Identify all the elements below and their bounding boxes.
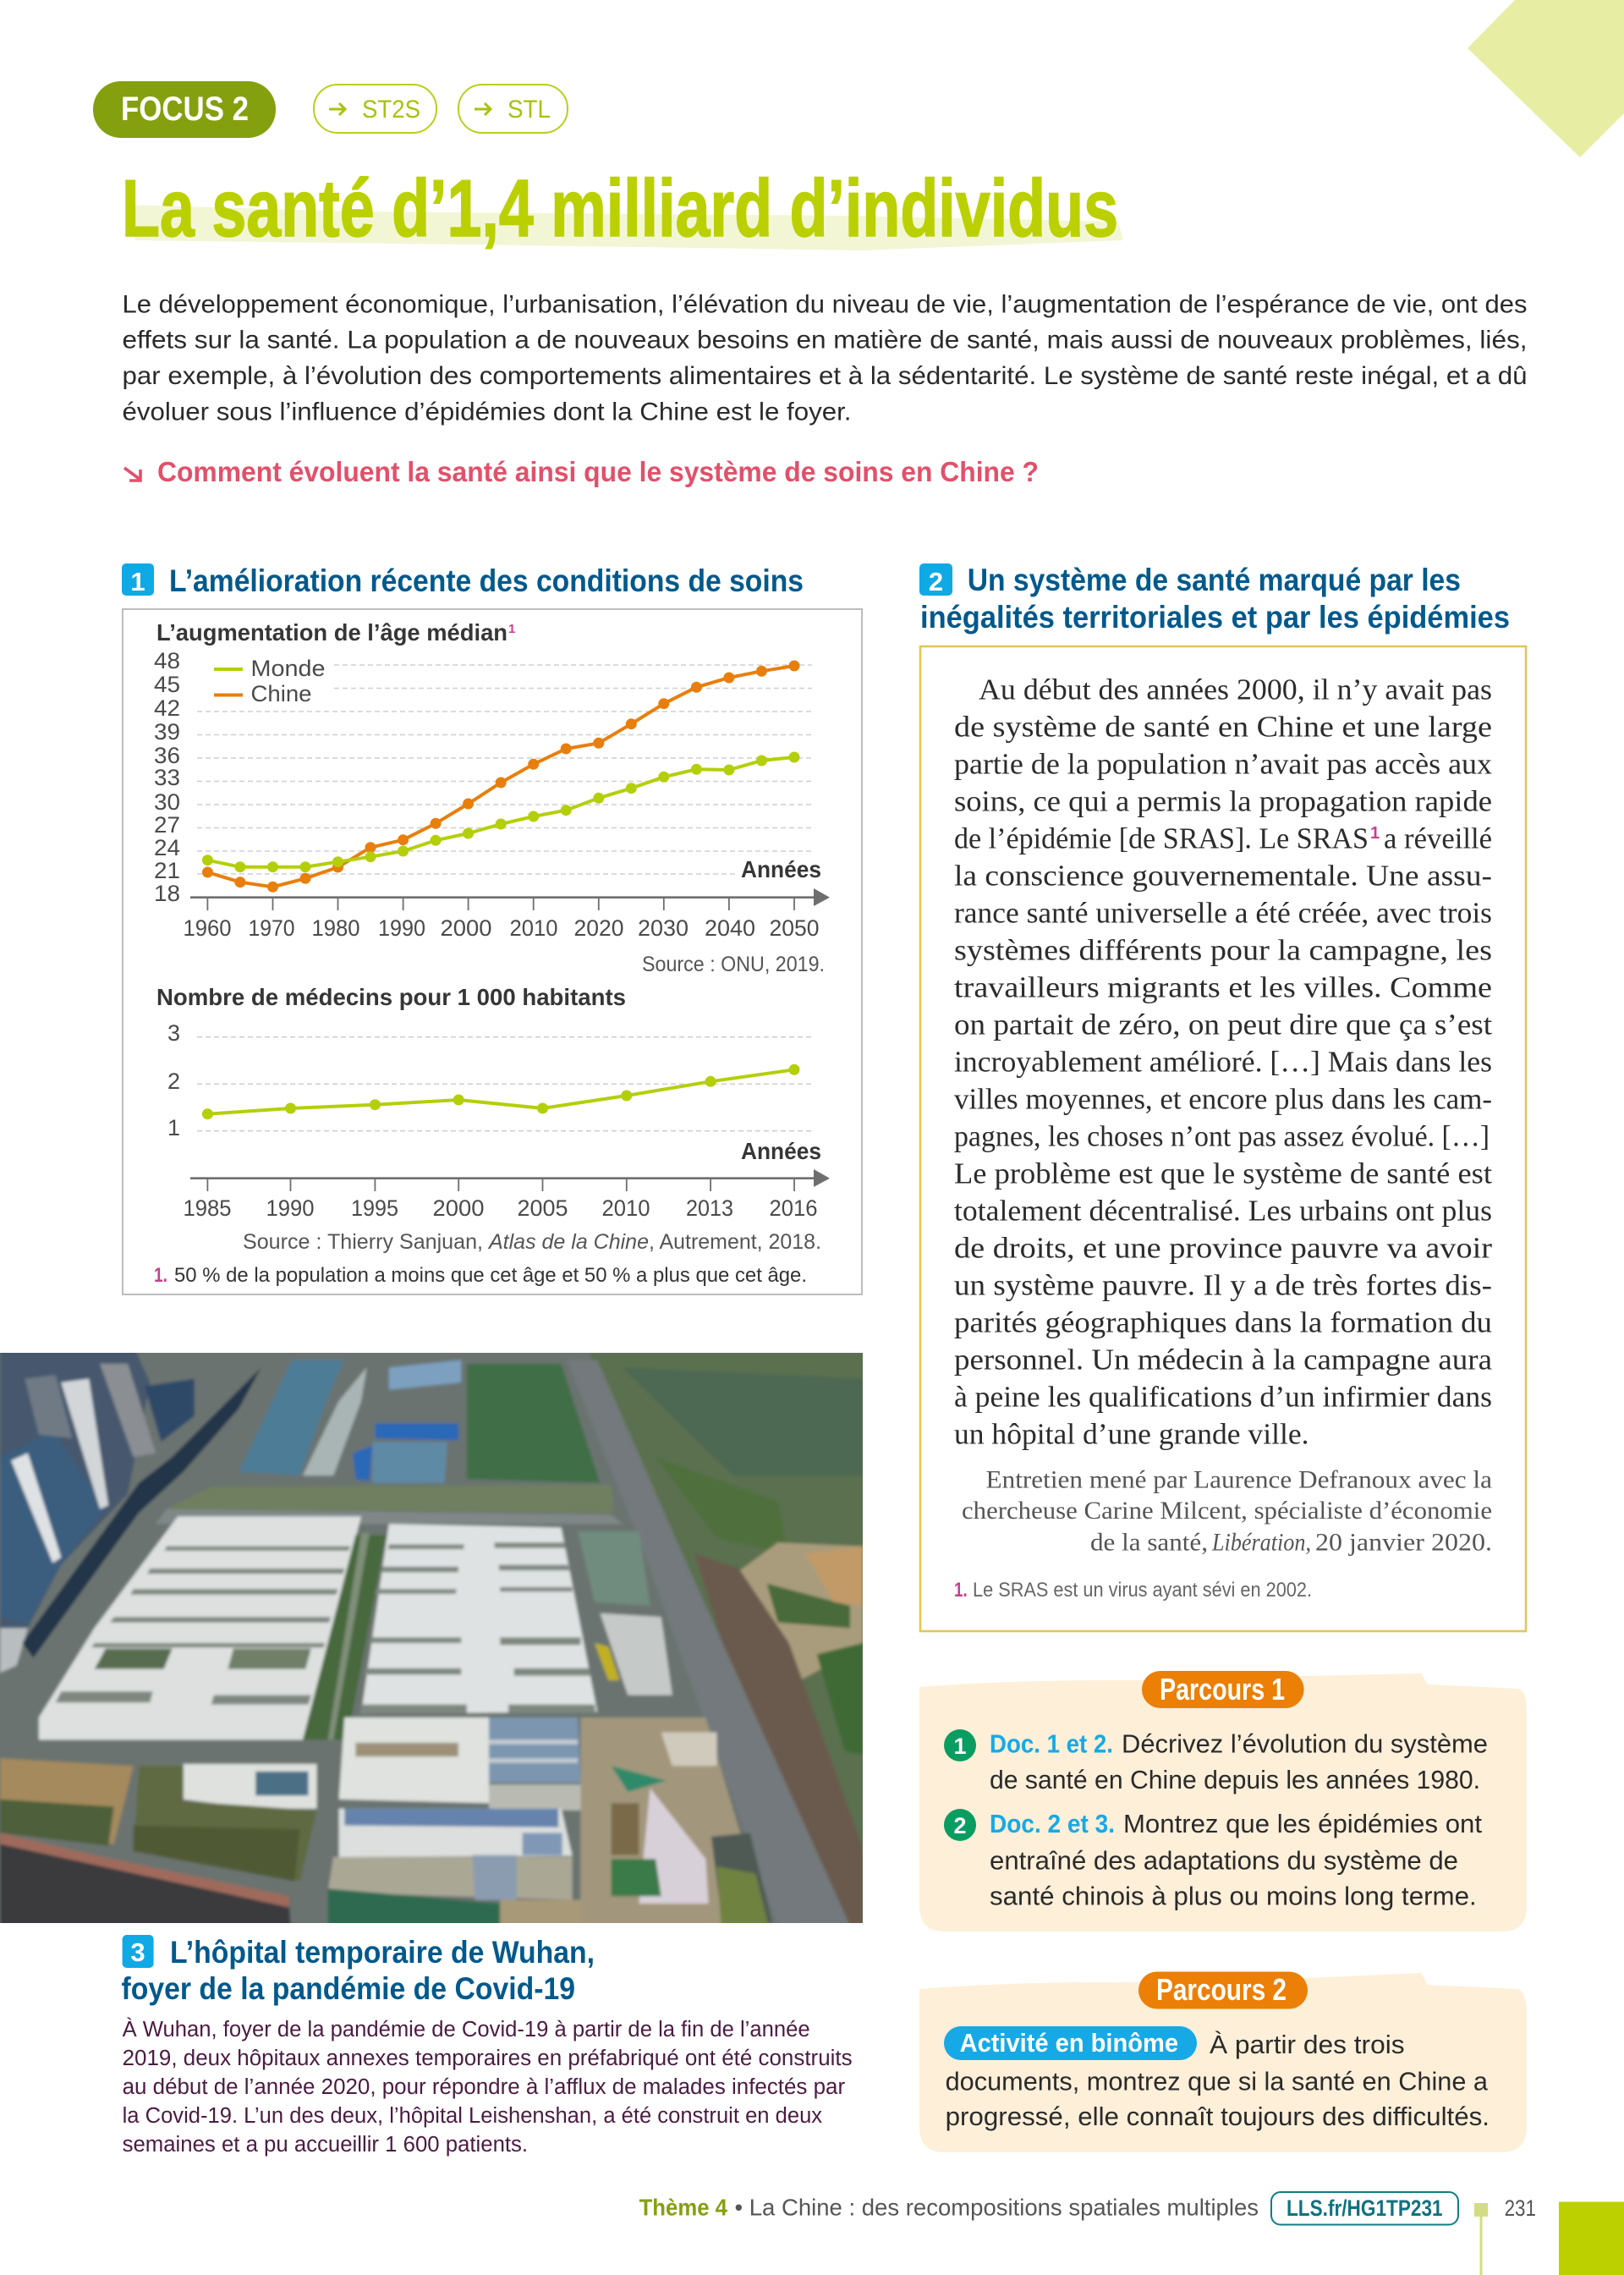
source: Sanjuan: Atlas de la Chine (487, 1230, 649, 1254)
interview text: systèmes différents pour la campagne, les (954, 934, 1492, 967)
tag: STL (458, 85, 568, 133)
interview text: Au début des années 2000, il n’y avait pas (979, 673, 1492, 706)
interview attribution: chercheuse Carine Milcent, spécialiste d’économie (962, 1497, 1492, 1525)
x axis years: 2010 (602, 1195, 650, 1221)
y axis values: 36 (154, 743, 180, 768)
document 2 heading: Un système de santé marqué par les (968, 563, 1461, 597)
title with brush highlight: La santé d’1,4 milliard d’individus (122, 163, 1118, 254)
interview text: un hôpital d’une grande ville. (954, 1418, 1309, 1451)
source: Sanjuan (243, 1230, 821, 1254)
problem question: Comment évoluent la santé ainsi que le système de soins en Chine ? (157, 456, 1039, 487)
x axis years: 2016 (770, 1195, 817, 1221)
y axis values: 18 (154, 881, 180, 906)
y axis values: 24 (154, 835, 180, 860)
question 1: Doc. 1 et 2. (990, 1729, 1113, 1759)
y axis values: 33 (154, 765, 180, 790)
activity text (946, 2030, 1490, 2131)
corner lime block (1559, 2201, 1624, 2275)
chart heading: median age: L’augmentation de l’âge médian (156, 619, 508, 646)
question 2: entraîné des adaptations du système de (990, 1846, 1458, 1876)
line chart: median age (154, 648, 830, 941)
y axis values: 21 (154, 858, 180, 883)
interview text: 1 (1370, 824, 1380, 843)
line chart: doctors per 1000 (167, 1020, 830, 1221)
activity text: À partir des trois (1210, 2030, 1405, 2059)
y axis values (167, 1020, 180, 1140)
x axis years: 1995 (351, 1195, 398, 1221)
question 2: Montrez que les épidémies ont (1123, 1809, 1482, 1838)
x axis years: 2013 (686, 1195, 733, 1221)
pill: Parcours 1: Parcours 1 (1160, 1672, 1285, 1706)
interview attribution: Entretien mené par Laurence Defranoux avec la (986, 1465, 1492, 1493)
y axis values: 3 (167, 1020, 180, 1046)
chart heading: doctors: Nombre de médecins pour 1 000 habitants (156, 984, 626, 1010)
tag: ST2S: ST2S (362, 96, 420, 124)
y axis values: 27 (154, 812, 180, 838)
x axis years: 2010 (509, 915, 558, 941)
interview text: villes moyennes, et encore plus dans les cam- (954, 1083, 1492, 1116)
caption paragraph: Wuhan: la Covid-19. L’un des deux, l’hôpital Leishenshan, a été construit en deux (123, 2104, 822, 2128)
x axis years: 2000 (433, 1195, 484, 1221)
x axis years: 2005 (518, 1195, 568, 1221)
question 2: 2 (953, 1813, 967, 1838)
caption paragraph: Wuhan: 2019, deux hôpitaux annexes temporaires en préfabriqué ont été construits (123, 2047, 853, 2070)
y axis values (154, 648, 180, 906)
page number: 231 (1505, 2195, 1536, 2221)
question 1 (944, 1729, 1488, 1794)
question 1: 1 (953, 1734, 967, 1759)
pill: Activité en binôme: Activité en binôme (960, 2028, 1178, 2058)
badge: FOCUS 2 (93, 81, 276, 138)
interview text: soins, ce qui a permis la propagation rapide (954, 785, 1492, 818)
interview text: de l’épidémie [de SRAS]. Le SRAS (954, 822, 1369, 855)
chart heading: median age: 1 (508, 622, 515, 636)
panel: interview text frame (920, 646, 1526, 1631)
interview text: totalement décentralisé. Les urbains ont plus (954, 1195, 1492, 1228)
caption paragraph: Wuhan (123, 2017, 853, 2157)
x axis years: 1990 (266, 1195, 315, 1221)
source: ONU: Source : ONU, 2019. (642, 953, 825, 976)
series: Chine (202, 660, 799, 893)
x axis years: 2040 (705, 915, 755, 941)
y axis values: 1 (167, 1115, 180, 1140)
interview text: un système pauvre. Il y a de très fortes dis- (954, 1269, 1492, 1302)
interview text: partie de la population n’avait pas accès aux (954, 748, 1493, 781)
activity text: documents, montrez que si la santé en Chine a (946, 2066, 1489, 2096)
footnote: SRAS: 1. (954, 1579, 968, 1602)
x axis years (183, 1195, 817, 1221)
interview attribution: Libération, (1211, 1529, 1311, 1557)
interview attribution (962, 1465, 1492, 1557)
x axis years: 2020 (573, 915, 624, 941)
document 2 heading: 2 (929, 567, 943, 596)
source: Sanjuan: Source : Thierry Sanjuan, (243, 1230, 483, 1254)
interview text: rance santé universelle a été créée, avec trois (954, 897, 1492, 930)
axis label: Années (741, 856, 821, 882)
badge: FOCUS 2: FOCUS 2 (121, 91, 249, 128)
footer link pill: LLS.fr/HG1TP231 (1287, 2195, 1443, 2221)
interview text: on partait de zéro, on peut dire que ça s’est (954, 1008, 1492, 1041)
pill: Parcours 2: Parcours 2 (1156, 1972, 1287, 2007)
x axis years: 1985 (183, 1195, 232, 1221)
question 1: Décrivez l’évolution du système (1122, 1729, 1488, 1759)
source: Sanjuan: , Autrement, 2018. (649, 1230, 821, 1254)
y axis values: 48 (154, 648, 180, 673)
footnote: median age: 1. (154, 1264, 167, 1287)
document 2 heading: inégalités territoriales et par les épidémies (920, 600, 1510, 635)
intro paragraph: par exemple, à l’évolution des comportements alimentaires et à la sédentarité. Le système de santé reste inégal, et a dû (122, 362, 1528, 390)
x axis years: 1990 (378, 915, 425, 941)
x axis years: 2030 (638, 915, 689, 941)
interview text: parités géographiques dans la formation du (954, 1306, 1492, 1339)
document 3 heading: 3 (130, 1937, 145, 1967)
axis arrow (190, 1169, 830, 1191)
y axis values: 42 (154, 695, 180, 721)
question 2: santé chinois à plus ou moins long terme. (990, 1882, 1477, 1910)
panel: Parcours 1 (919, 1671, 1527, 1932)
caption paragraph: Wuhan: semaines et a pu accueillir 1 600 patients. (123, 2133, 528, 2157)
footnote: median age: 50 % de la population a moins que cet âge et 50 % a plus que cet âge. (174, 1264, 807, 1287)
legend: Monde (250, 656, 325, 681)
series: doctors (202, 1064, 799, 1119)
legend: Chine (250, 681, 311, 706)
interview attribution: de la santé, (1090, 1529, 1208, 1557)
x axis years: 2050 (770, 915, 819, 941)
panel: Parcours 2 (919, 1971, 1527, 2152)
y axis values: 39 (154, 719, 180, 745)
axis label: Années (741, 1138, 821, 1164)
footer theme text: Thème 4 (639, 2195, 727, 2220)
tag: STL: STL (508, 96, 551, 124)
axis arrow (190, 888, 830, 910)
x axis years: 2000 (440, 915, 492, 941)
document 1 heading: L’amélioration récente des conditions de soins (169, 563, 804, 598)
document 3 heading: foyer de la pandémie de Covid-19 (122, 1971, 575, 2006)
interview text (954, 673, 1493, 1451)
document 3 heading (122, 1935, 595, 2006)
caption paragraph: Wuhan: au début de l’année 2020, pour répondre à l’afflux de malades infectés par (123, 2075, 846, 2099)
panel: charts frame (123, 609, 862, 1294)
document 2 heading (919, 563, 1510, 635)
interview text: à peine les qualifications d’un infirmier dans (954, 1381, 1492, 1414)
interview text: incroyablement amélioré. […] Mais dans les (954, 1046, 1492, 1079)
intro paragraph: effets sur la santé. La population a de nouveaux besoins en matière de santé, mais aussi de nouveaux problèmes, liés, (122, 327, 1528, 354)
intro paragraph: Le développement économique, l’urbanisation, l’élévation du niveau de vie, l’augmentation de l’espérance de vie, ont des (122, 291, 1528, 318)
y axis values: 2 (167, 1069, 180, 1094)
interview text: travailleurs migrants et les villes. Comme (954, 971, 1492, 1004)
intro paragraph (122, 291, 1528, 426)
y axis values: 30 (154, 789, 180, 815)
document 1 heading: 1 (130, 567, 145, 596)
interview attribution: 20 janvier 2020. (1315, 1529, 1492, 1557)
interview text: la conscience gouvernementale. Une assu- (954, 860, 1492, 893)
x axis years: 1980 (311, 915, 360, 941)
interview text: Le problème est que le système de santé est (954, 1157, 1492, 1190)
document 3 heading: L’hôpital temporaire de Wuhan, (170, 1935, 595, 1970)
footnote: SRAS: Le SRAS est un virus ayant sévi en 2002. (973, 1579, 1312, 1602)
footer link pill (1271, 2192, 1458, 2225)
x axis years: 1970 (249, 915, 294, 941)
series: Monde (202, 751, 799, 872)
question 1: de santé en Chine depuis les années 1980. (990, 1765, 1480, 1794)
interview text: pagnes, les choses n’ont pas assez évolué. […] (954, 1120, 1490, 1153)
x axis years: 1960 (183, 915, 232, 941)
corner diamond decoration (1468, 0, 1624, 157)
tag: ST2S (314, 85, 436, 133)
question 2 (944, 1809, 1482, 1910)
interview text: de système de santé en Chine et une large (954, 711, 1492, 744)
activity text: progressé, elle connaît toujours des difficultés. (946, 2102, 1490, 2131)
question 2: Doc. 2 et 3. (990, 1809, 1115, 1838)
caption paragraph: Wuhan: À Wuhan, foyer de la pandémie de Covid-19 à partir de la fin de l’année (123, 2017, 810, 2041)
footer marker (1474, 2203, 1488, 2275)
interview text: personnel. Un médecin à la campagne aura (954, 1344, 1492, 1377)
photo: temporary hospital of Wuhan, aerial view (0, 1338, 889, 1941)
x axis years (183, 915, 819, 941)
intro paragraph: évoluer sous l’influence d’épidémies dont la Chine est le foyer. (122, 398, 851, 426)
footer theme text: • La Chine : des recompositions spatiales multiples (734, 2195, 1259, 2220)
y axis values: 45 (154, 672, 180, 697)
legend (214, 656, 325, 706)
interview text: de droits, et une province pauvre va avoir (954, 1232, 1492, 1265)
interview text: a réveillé (1384, 822, 1492, 855)
